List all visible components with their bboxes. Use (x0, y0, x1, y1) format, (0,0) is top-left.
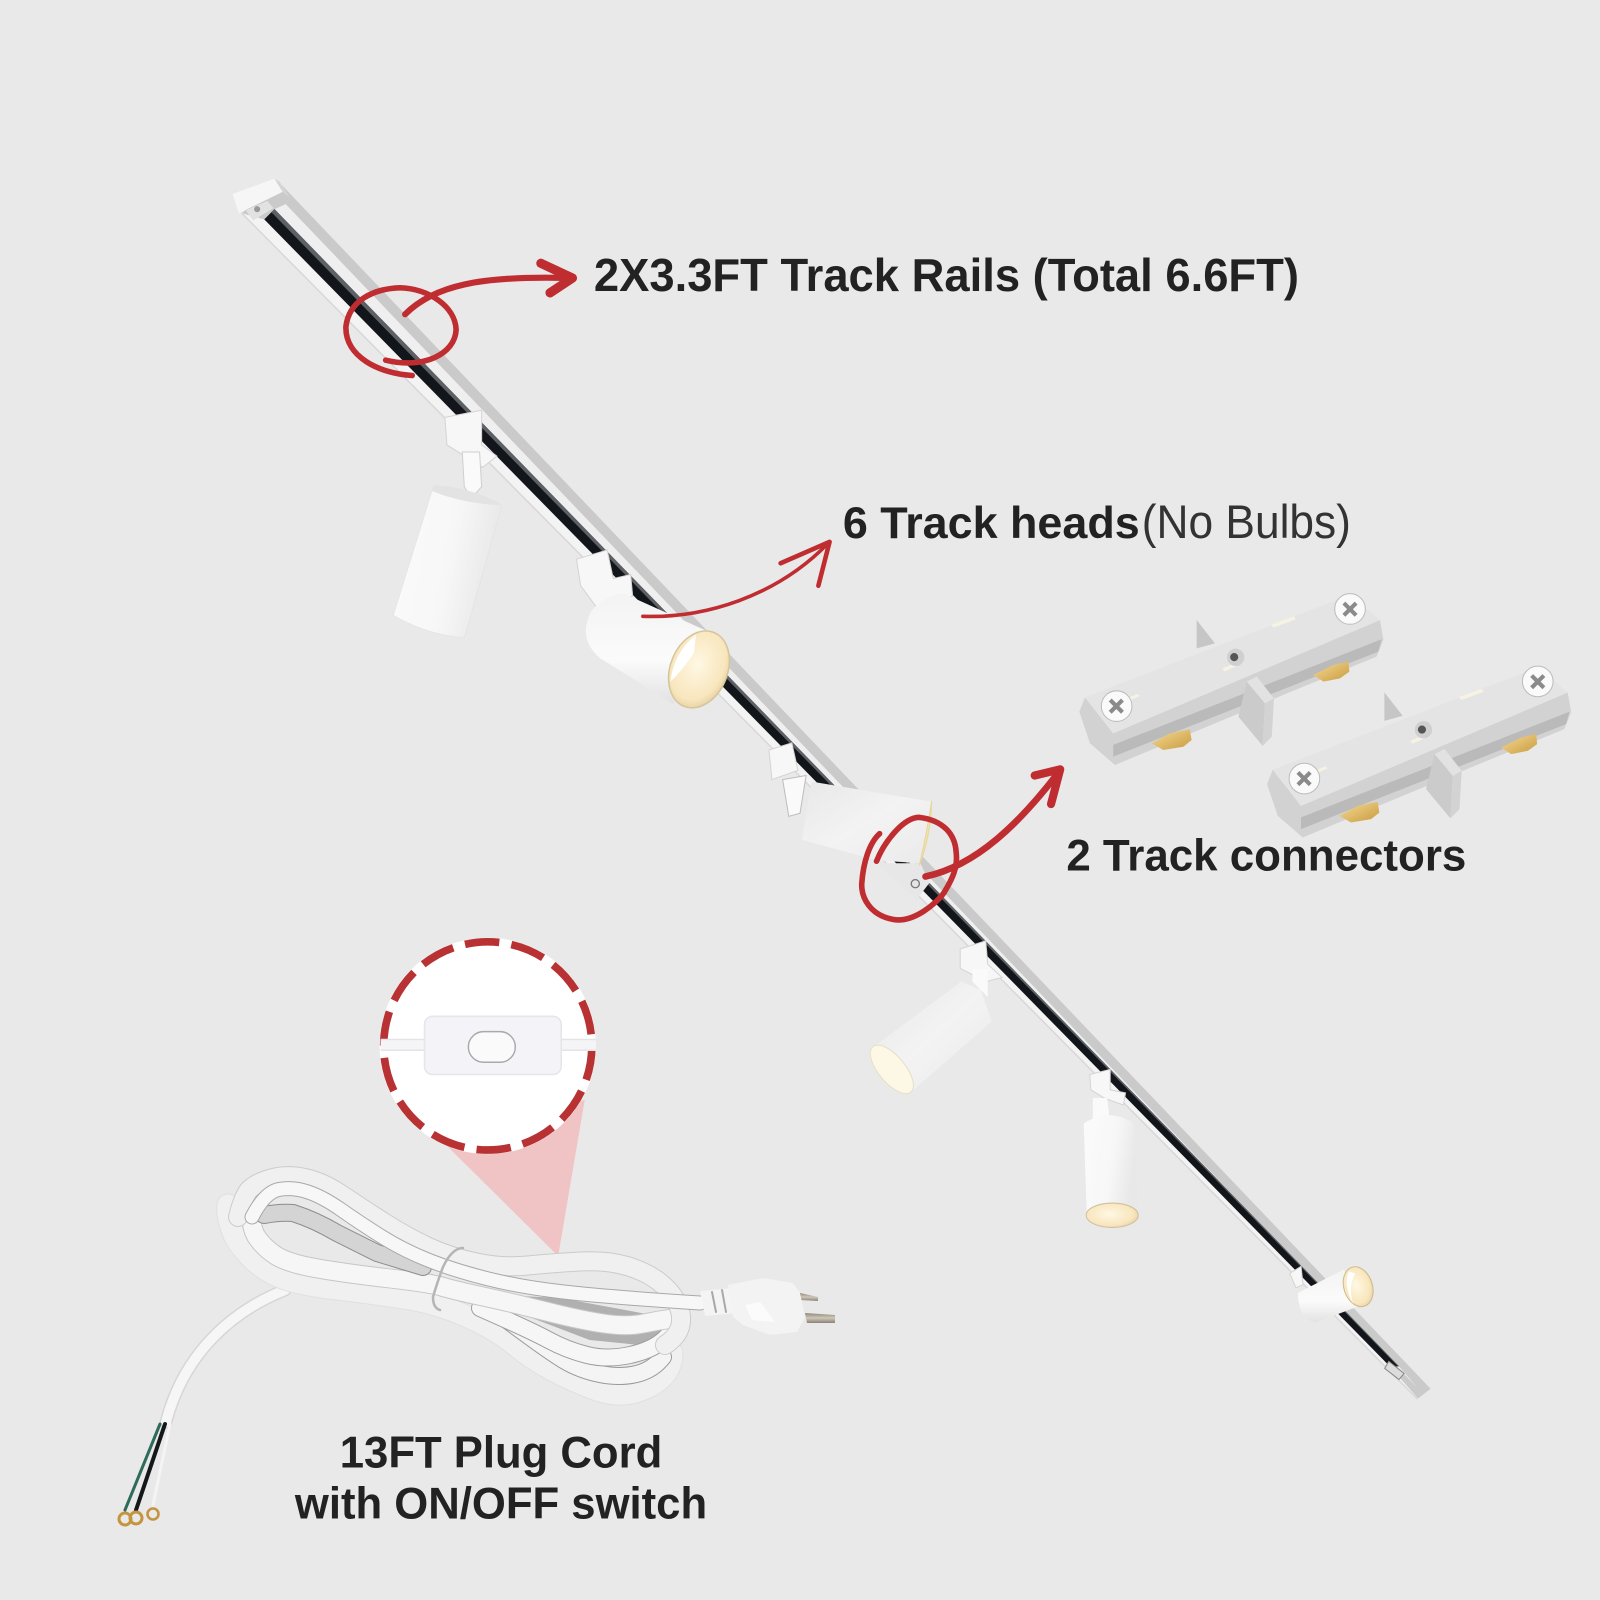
track connector 2 (1267, 666, 1571, 837)
track head 1 (393, 410, 502, 638)
heading: plug cord (294, 1426, 707, 1528)
track head 4 (863, 941, 1002, 1101)
track head 2 (577, 550, 740, 717)
rocker switch (424, 1016, 561, 1074)
track head 3 (769, 743, 932, 865)
track joint at connector (877, 863, 930, 900)
rail callout: red circle and arrow (346, 263, 572, 376)
track rail (233, 179, 1431, 1399)
heading: track rails: 2X3.3FT Track Rails (Total 6.6FT) (594, 249, 1299, 301)
track head 6 (1290, 1263, 1378, 1322)
zoom cone (442, 1100, 585, 1256)
plug cord coil (119, 1176, 835, 1525)
heads callout arrow (643, 542, 830, 616)
heading: track heads: 6 Track heads(No Bulbs) (843, 496, 1351, 548)
track head 5 (1084, 1069, 1138, 1228)
track connector 1 (1079, 594, 1383, 765)
far end plate (1385, 1361, 1404, 1380)
coil strands (228, 1176, 700, 1394)
loose tail with wires (119, 1290, 285, 1525)
heading: track connectors: 2 Track connectors (1066, 829, 1466, 880)
switch zoom circle (380, 938, 596, 1154)
connector callout: red circle and arrow (862, 769, 1060, 920)
rail end cap (233, 179, 290, 220)
heading: plug cord: 13FT Plug Cord (340, 1426, 662, 1477)
plug (700, 1278, 835, 1335)
heading: plug cord: with ON/OFF switch (294, 1477, 707, 1528)
